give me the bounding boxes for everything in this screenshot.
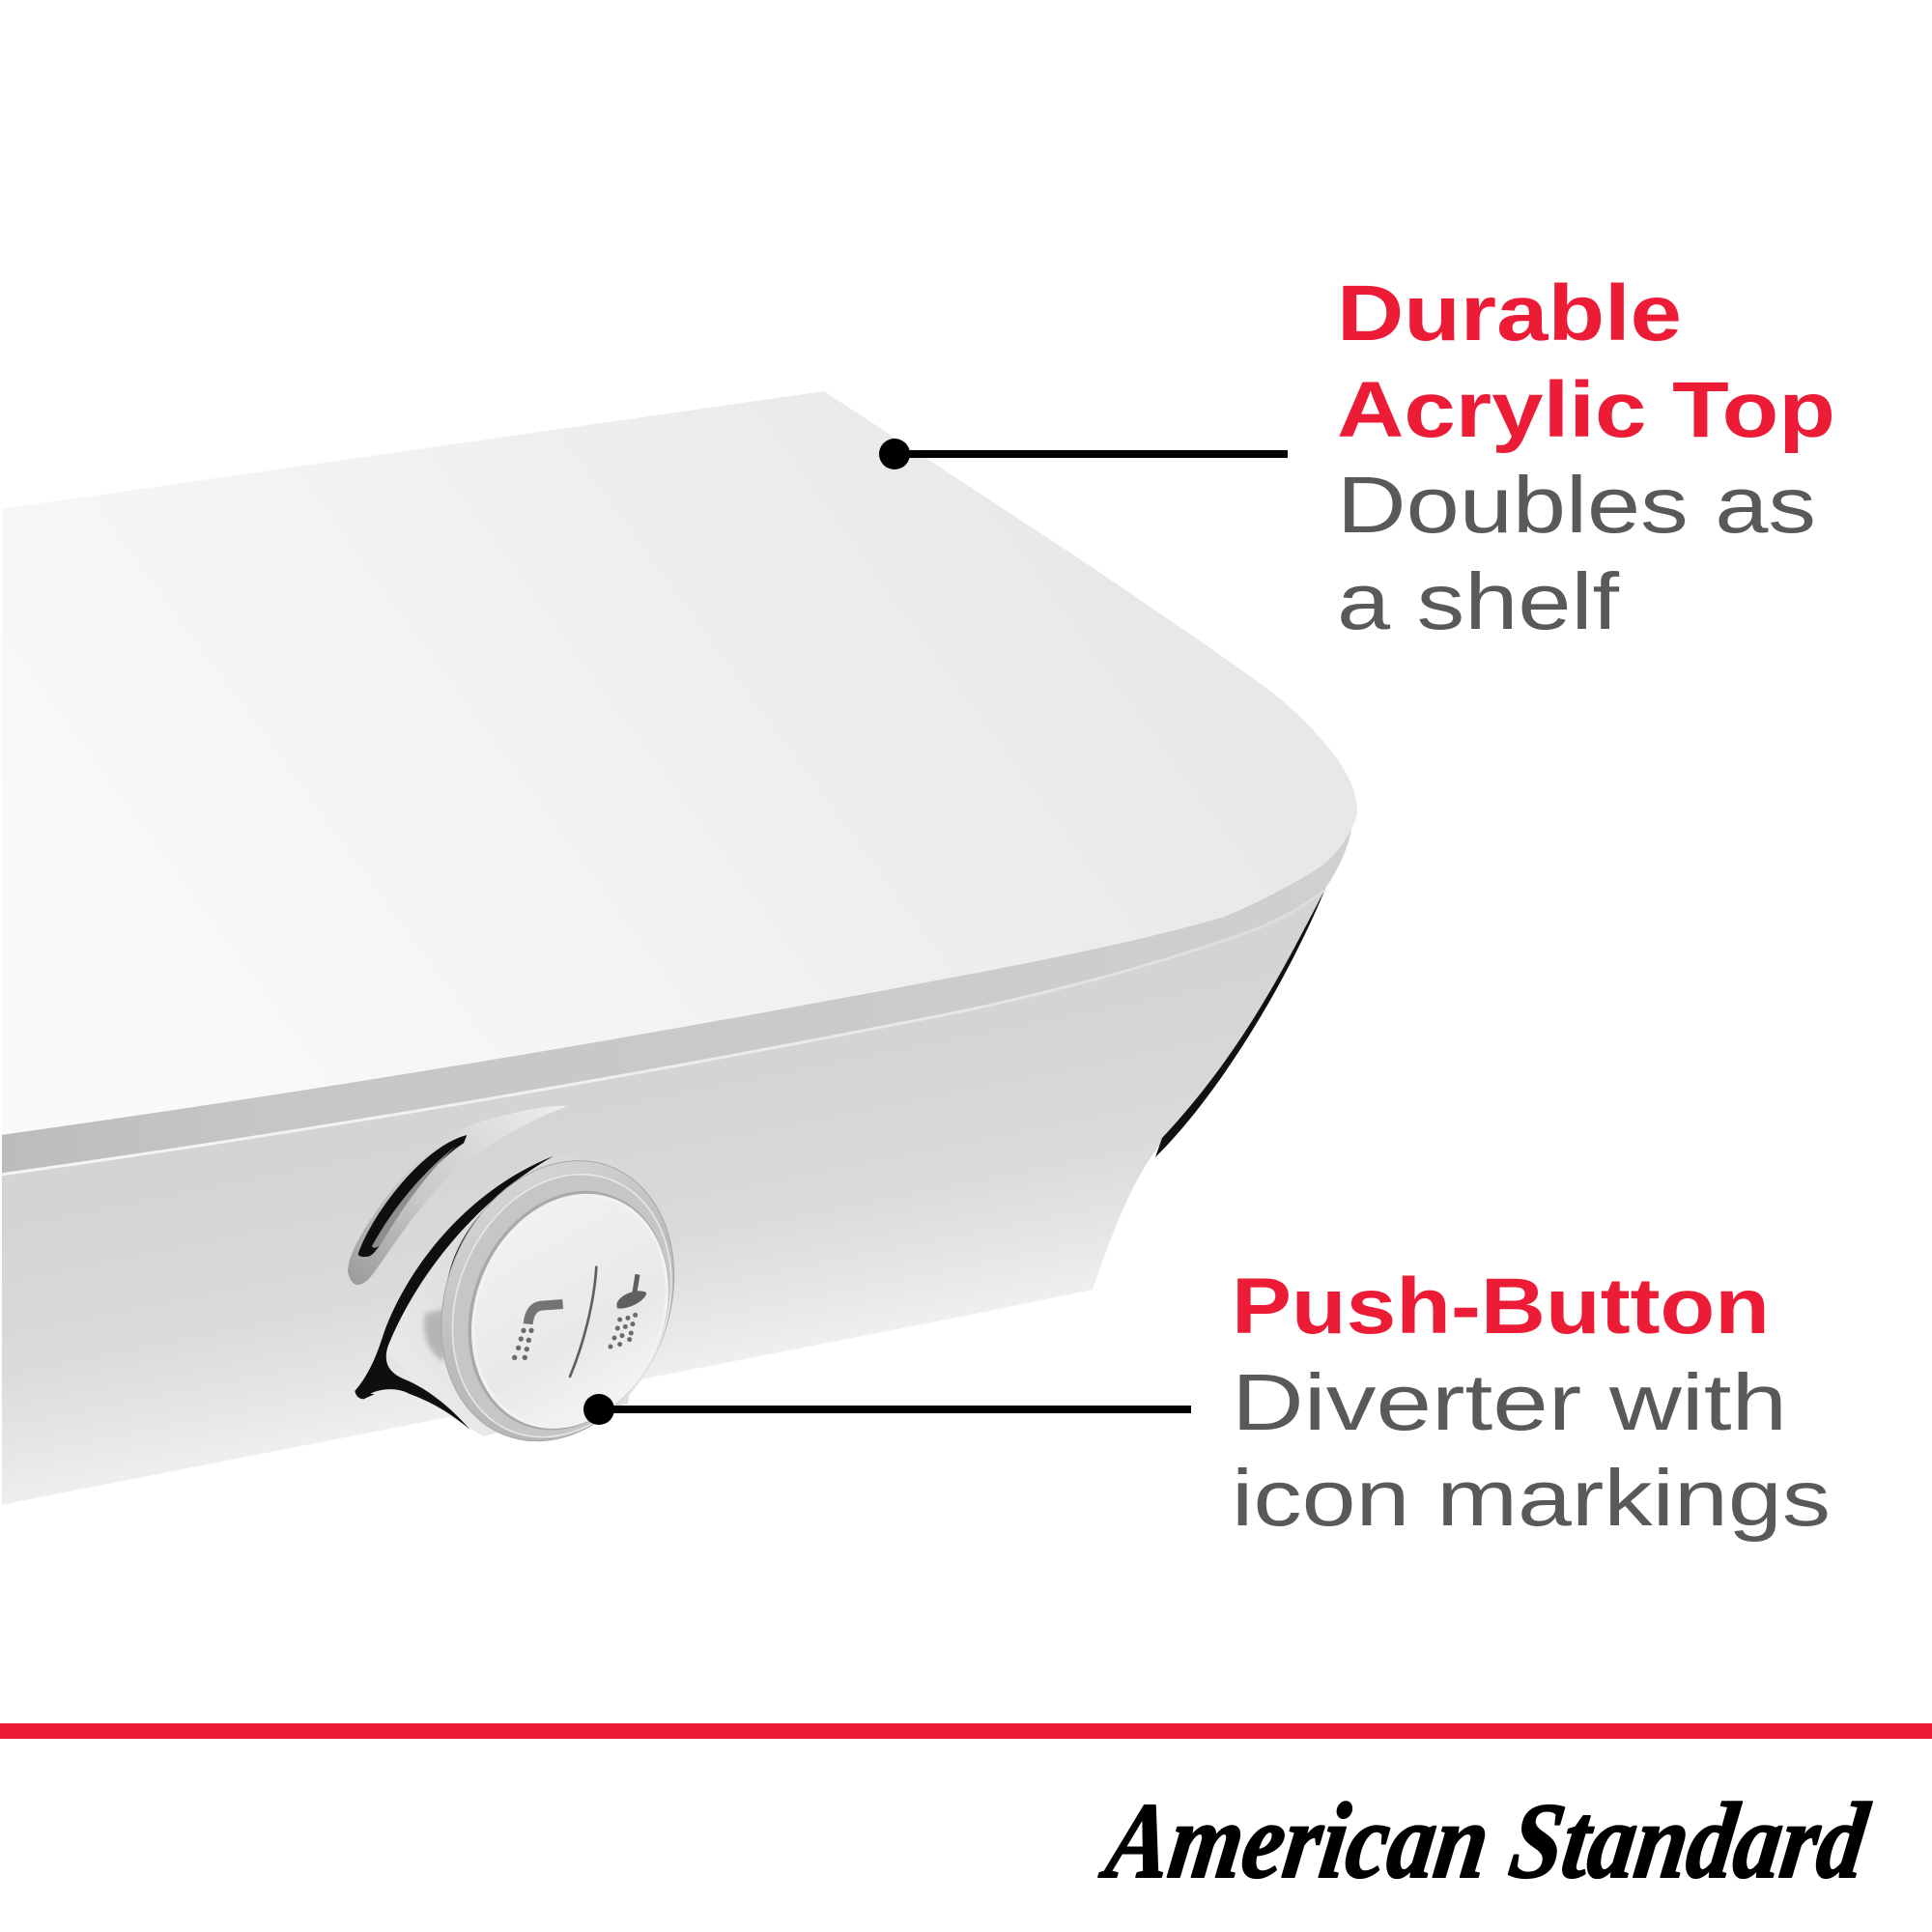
button face xyxy=(440,1166,700,1457)
diverter button xyxy=(348,1106,715,1476)
description: Doubles as xyxy=(1337,460,1816,550)
body of spout xyxy=(0,889,1325,1505)
leader line and dot xyxy=(879,439,1288,469)
upper slot dark crescent xyxy=(358,1135,467,1257)
divider slash xyxy=(570,1267,596,1377)
pale line under lip xyxy=(0,890,1325,1175)
red divider bar xyxy=(0,1723,1932,1739)
heading: Durable xyxy=(1337,270,1682,357)
description: icon markings xyxy=(1232,1453,1831,1543)
soft shadow in wedge xyxy=(424,1307,451,1362)
inner dark crescent xyxy=(445,1190,509,1308)
black edge on body xyxy=(1155,889,1325,1157)
left edge strip xyxy=(0,502,2,1507)
callout: durable acrylic top xyxy=(879,270,1835,646)
description xyxy=(1337,460,1816,646)
description xyxy=(1232,1357,1831,1543)
upper chrome slot xyxy=(348,1106,568,1285)
heading: Push-Button xyxy=(1232,1263,1770,1350)
drip highlight xyxy=(370,1389,409,1395)
description: Diverter with xyxy=(1232,1357,1787,1447)
grey lip under top xyxy=(0,821,1352,1174)
acrylic top surface xyxy=(0,391,1357,1135)
icon: shower head xyxy=(608,1274,646,1349)
face shadow ring xyxy=(434,1160,703,1461)
dark shadow at ring base xyxy=(565,1418,586,1432)
upper slot inner streak xyxy=(372,1147,456,1248)
leader line and dot xyxy=(583,1394,1191,1425)
heading xyxy=(1337,270,1835,454)
inner ring line xyxy=(414,1141,710,1470)
icon: tub spout xyxy=(512,1304,563,1360)
product: bath spout xyxy=(0,391,1357,1507)
heading: Acrylic Top xyxy=(1337,366,1835,454)
lower chrome wedge xyxy=(384,1156,650,1436)
chrome dark sweep and drip xyxy=(355,1156,554,1430)
description: a shelf xyxy=(1337,556,1620,646)
callout: push-button diverter xyxy=(583,1263,1831,1543)
outer chrome ring xyxy=(401,1125,715,1476)
